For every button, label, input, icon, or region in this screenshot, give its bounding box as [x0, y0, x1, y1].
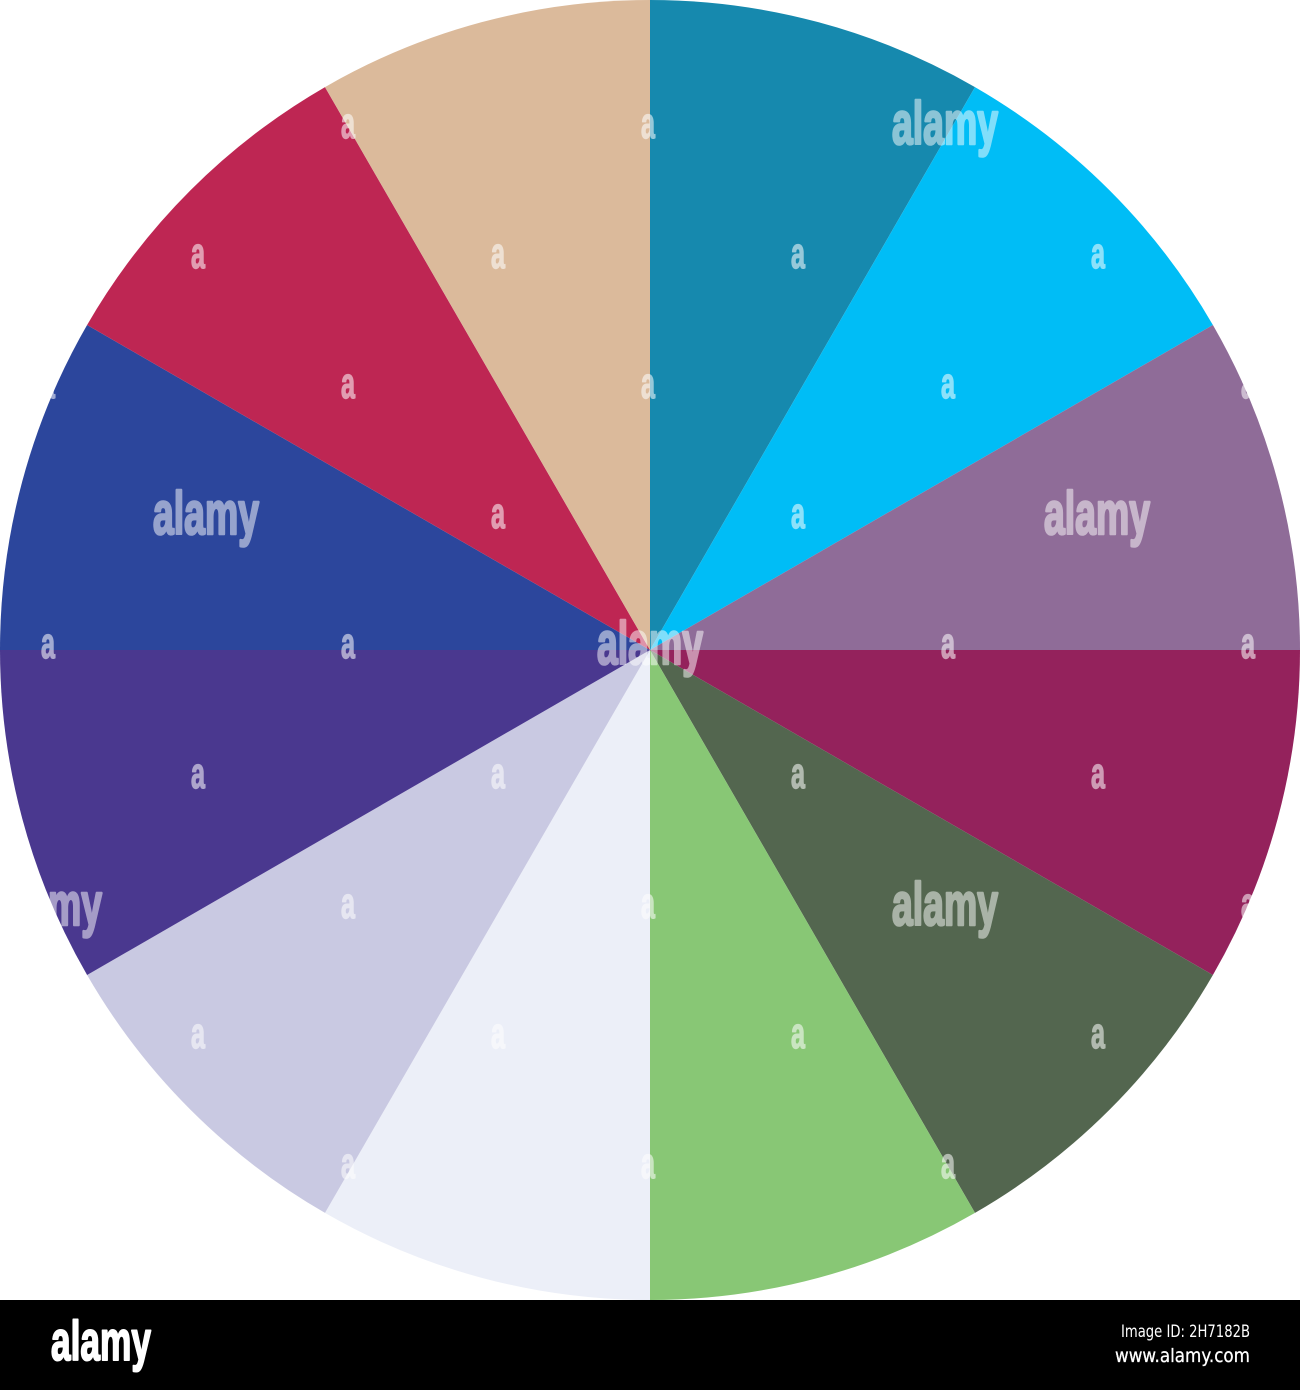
large watermarks: alamy — [892, 871, 998, 938]
large watermarks — [0, 90, 1150, 938]
large watermarks: alamy — [892, 90, 998, 157]
small repeating watermarks: a — [1091, 749, 1105, 798]
small repeating watermarks: a — [341, 359, 355, 408]
small repeating watermarks: a — [491, 749, 505, 798]
large watermarks: alamy — [153, 480, 259, 547]
footer bar — [0, 1300, 1300, 1390]
footer logo: alamy — [51, 1309, 151, 1372]
website url: www.alamy.com — [1115, 1345, 1250, 1367]
large watermarks: alamy — [1044, 480, 1150, 547]
small repeating watermarks: a — [1241, 879, 1255, 928]
segment 1: teal blue — [650, 0, 975, 650]
small repeating watermarks: a — [641, 879, 655, 928]
small repeating watermarks — [41, 99, 1255, 1188]
small repeating watermarks: a — [791, 489, 805, 538]
small repeating watermarks: a — [1241, 619, 1255, 668]
small repeating watermarks: a — [1241, 359, 1255, 408]
small repeating watermarks: a — [1091, 1009, 1105, 1058]
small repeating watermarks: a — [491, 489, 505, 538]
small repeating watermarks: a — [941, 619, 955, 668]
small repeating watermarks: a — [41, 359, 55, 408]
large watermarks: alamy — [0, 871, 102, 938]
small repeating watermarks: a — [941, 359, 955, 408]
small repeating watermarks: a — [491, 1009, 505, 1058]
small repeating watermarks: a — [341, 1139, 355, 1188]
small repeating watermarks: a — [1091, 229, 1105, 278]
segment 4: magenta plum — [650, 650, 1300, 975]
segment 12: tan — [325, 0, 650, 650]
segment 2: sky blue — [650, 87, 1213, 650]
small repeating watermarks: a — [191, 229, 205, 278]
small repeating watermarks: a — [191, 1009, 205, 1058]
segment 5: dark olive green — [650, 650, 1213, 1213]
segment 8: pale lavender — [87, 650, 650, 1213]
small repeating watermarks: a — [341, 99, 355, 148]
segment 9: deep violet — [0, 650, 650, 975]
small repeating watermarks: a — [791, 229, 805, 278]
segment 3: muted purple — [650, 325, 1300, 650]
small repeating watermarks: a — [641, 99, 655, 148]
small repeating watermarks: a — [641, 1139, 655, 1188]
small repeating watermarks: a — [791, 1009, 805, 1058]
small repeating watermarks: a — [491, 229, 505, 278]
small repeating watermarks: a — [341, 619, 355, 668]
segment 6: light green — [650, 650, 975, 1300]
image id: Image ID: 2H7182B — [1121, 1322, 1250, 1342]
small repeating watermarks: a — [791, 749, 805, 798]
small repeating watermarks: a — [941, 1139, 955, 1188]
segment 11: crimson — [87, 87, 650, 650]
segment 10: royal blue — [0, 325, 650, 650]
small repeating watermarks: a — [41, 619, 55, 668]
small repeating watermarks: a — [191, 749, 205, 798]
small repeating watermarks: a — [641, 359, 655, 408]
large watermarks: alamy — [597, 610, 703, 677]
small repeating watermarks: a — [341, 879, 355, 928]
segment 7: pale blue white — [325, 650, 650, 1300]
